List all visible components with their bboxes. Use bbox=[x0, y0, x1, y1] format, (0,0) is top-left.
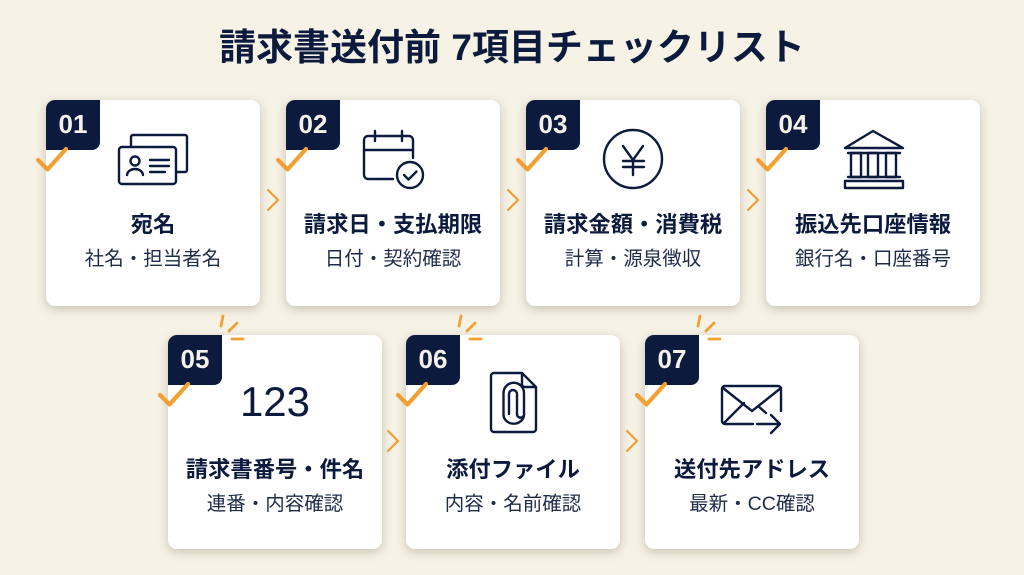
number badge 01: 01 bbox=[59, 109, 87, 139]
icon: orange check bbox=[36, 146, 68, 172]
icon: envelope with arrow bbox=[720, 384, 782, 434]
panel: 02 請求日・支払期限 bbox=[286, 100, 500, 306]
number badge 04: 04 bbox=[779, 109, 807, 139]
arrow 3 to 4 bbox=[746, 188, 760, 212]
sub text: 日付・契約確認 bbox=[325, 248, 461, 270]
number badge 07: 07 bbox=[658, 344, 686, 374]
number badge 03 bbox=[526, 100, 580, 150]
heading: 請求書番号・件名 bbox=[186, 457, 364, 482]
sub text: 銀行名・口座番号 bbox=[795, 248, 951, 270]
panel: 04 振込先口座情報 bbox=[766, 100, 980, 306]
arrow 1 to 2 bbox=[266, 188, 280, 212]
icon: 123: 123 bbox=[240, 378, 310, 425]
title: 請求書送付前 7項目チェックリスト bbox=[219, 27, 805, 68]
panel: 06 添付ファイル bbox=[406, 335, 620, 549]
number badge 06 bbox=[406, 335, 460, 385]
panel: 01 宛名 bbox=[46, 100, 260, 306]
heading: 送付先アドレス bbox=[674, 457, 830, 482]
heading: 振込先口座情報 bbox=[795, 212, 951, 237]
sub text: 連番・内容確認 bbox=[207, 493, 343, 515]
number badge 07 bbox=[645, 335, 699, 385]
icon: orange check bbox=[756, 146, 788, 172]
sparks bbox=[696, 314, 722, 340]
sparks bbox=[220, 314, 244, 340]
number badge 02: 02 bbox=[299, 109, 327, 139]
number badge 04 bbox=[766, 100, 820, 150]
sub text: 内容・名前確認 bbox=[445, 493, 581, 515]
sub text: 最新・CC確認 bbox=[689, 493, 815, 515]
number badge 05 bbox=[168, 335, 222, 385]
heading: 請求日・支払期限 bbox=[304, 212, 482, 237]
arrow 6 to 7 bbox=[626, 430, 638, 452]
icon: bank bbox=[844, 130, 904, 190]
icon: orange check bbox=[396, 382, 428, 407]
heading: 請求金額・消費税 bbox=[544, 212, 722, 237]
number badge 02 bbox=[286, 100, 340, 150]
icon: calendar with check bbox=[362, 130, 424, 190]
panel: 07 送付先アドレス bbox=[645, 335, 859, 549]
sub text: 計算・源泉徴収 bbox=[565, 248, 701, 270]
icon: document with paperclip bbox=[490, 372, 538, 434]
icon: orange check bbox=[516, 146, 548, 172]
arrow 2 to 3 bbox=[506, 188, 520, 212]
number badge 03: 03 bbox=[539, 109, 567, 139]
icon: orange check bbox=[634, 382, 668, 407]
icon: orange check bbox=[158, 382, 190, 407]
heading: 宛名 bbox=[131, 212, 175, 237]
panel: 05 請求書番号・件名 bbox=[168, 335, 382, 549]
icon: yen coin bbox=[602, 128, 664, 190]
sparks bbox=[458, 314, 482, 340]
panel: 03 請求金額・消費税 bbox=[526, 100, 740, 306]
number badge 01 bbox=[46, 100, 100, 150]
sub text: 社名・担当者名 bbox=[85, 248, 221, 270]
number badge 05: 05 bbox=[181, 344, 209, 374]
arrow 5 to 6 bbox=[386, 430, 400, 452]
icon: ID cards bbox=[118, 134, 188, 186]
number badge 06: 06 bbox=[419, 344, 447, 374]
heading: 添付ファイル bbox=[446, 457, 580, 482]
icon: orange check bbox=[276, 146, 308, 172]
